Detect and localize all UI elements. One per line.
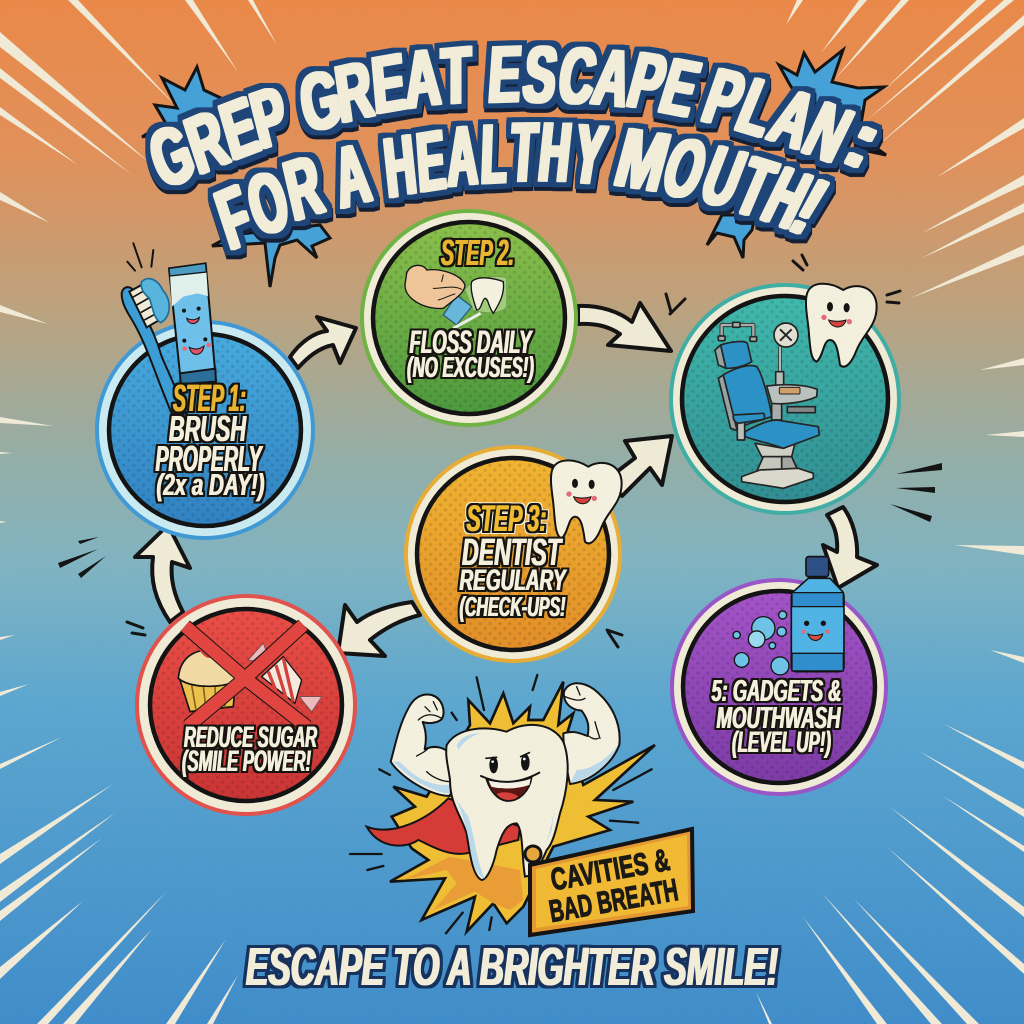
sugar badge bbox=[137, 596, 355, 814]
step 3 body: REGULARY bbox=[459, 564, 567, 597]
title line 1: P bbox=[243, 70, 296, 167]
mouthwash text: MOUTHWASH bbox=[716, 700, 840, 735]
title line 1: A bbox=[403, 33, 443, 127]
step 1 text bbox=[155, 378, 264, 502]
title line 1: T bbox=[441, 31, 471, 122]
arrow: step 2 to dentist chair bbox=[578, 303, 671, 351]
step 3 body: (CHECK-UPS! bbox=[459, 591, 565, 622]
muscular arms bbox=[391, 683, 620, 796]
title line 1: R bbox=[331, 45, 378, 141]
title line 1: C bbox=[553, 31, 602, 122]
title line 1: P bbox=[693, 53, 754, 145]
title line 2: T bbox=[508, 106, 540, 200]
title line 2: H bbox=[750, 150, 823, 246]
title line 1: A bbox=[586, 33, 639, 125]
title line 1: P bbox=[619, 36, 674, 128]
sign board bbox=[530, 829, 693, 935]
arrow: step 3 to reduce sugar bbox=[338, 602, 420, 656]
panel: step 3 dentist bbox=[406, 447, 622, 661]
mouthwash badge bbox=[672, 580, 886, 794]
title line 2: R bbox=[277, 137, 330, 239]
step 2 text: FLOSS DAILY bbox=[409, 324, 533, 360]
sugar text bbox=[182, 721, 317, 778]
step 3 badge bbox=[406, 447, 620, 661]
sign: cavities and bad breath bbox=[525, 829, 693, 935]
step 1 badge bbox=[97, 322, 313, 538]
panel: step 1 brush bbox=[97, 243, 313, 538]
title line 1: E bbox=[486, 30, 524, 121]
icon: smiling tooth on chair badge bbox=[806, 284, 877, 367]
title line 1: : bbox=[831, 95, 898, 185]
title line 1: E bbox=[212, 81, 267, 178]
title line 2: O bbox=[653, 120, 717, 217]
title line 1: G bbox=[294, 53, 347, 151]
step 3 body bbox=[459, 532, 567, 622]
panel: reduce sugar bbox=[137, 596, 355, 814]
panel: step 2 floss bbox=[362, 211, 576, 425]
icon: crossed out cupcake and candy bbox=[178, 625, 322, 727]
title line 1: E bbox=[369, 37, 409, 132]
icon: dental chair bbox=[715, 322, 819, 488]
mouthwash text: (LEVEL UP!) bbox=[732, 726, 831, 759]
title bbox=[139, 30, 898, 268]
step 2 text: (NO EXCUSES!) bbox=[406, 352, 534, 384]
arrow: dentist chair to mouthwash bbox=[823, 507, 877, 588]
sign text: BAD BREATH bbox=[547, 872, 681, 929]
icon: hand flossing tooth bbox=[405, 265, 507, 328]
red cape bbox=[367, 798, 520, 854]
burst orange patch bbox=[403, 857, 523, 910]
title line 2: U bbox=[690, 129, 756, 226]
title line 1 bbox=[139, 30, 898, 207]
arrow: step 3 to dentist chair bbox=[606, 436, 672, 496]
panel: dentist chair bbox=[671, 284, 899, 513]
step 1 text: PROPERLY bbox=[155, 438, 263, 479]
title line 2 bbox=[206, 106, 842, 268]
sign text: CAVITIES & bbox=[548, 842, 672, 897]
title line 2: T bbox=[723, 140, 787, 235]
title line 1: L bbox=[726, 63, 788, 154]
title line 2: F bbox=[206, 168, 262, 268]
step 2 badge bbox=[362, 211, 576, 425]
title line 2: M bbox=[607, 112, 678, 210]
title line 1: G bbox=[139, 107, 205, 207]
title line 2: L bbox=[480, 108, 508, 203]
tooth body bbox=[446, 725, 568, 880]
title line 2: E bbox=[414, 113, 448, 211]
title line 2: O bbox=[238, 152, 298, 255]
title line 2: A bbox=[328, 125, 376, 227]
title line 1: N bbox=[791, 87, 864, 180]
title line 1: S bbox=[519, 31, 562, 120]
step 1 text: (2x a DAY!) bbox=[156, 467, 264, 502]
title line 2: H bbox=[535, 106, 575, 200]
sign inner panel bbox=[536, 835, 688, 928]
title line 2: A bbox=[447, 109, 478, 206]
title line 2: ! bbox=[777, 163, 842, 252]
toothpaste faces bbox=[182, 307, 211, 354]
step 1 text: STEP 1: bbox=[172, 378, 246, 420]
mouthwash text: 5: GADGETS & bbox=[711, 673, 841, 708]
icon: mouthwash bottle and bubbles bbox=[733, 557, 844, 675]
panel: gadgets and mouthwash bbox=[672, 557, 886, 794]
title line 1: A bbox=[758, 73, 828, 166]
step 3 text bbox=[459, 498, 567, 622]
title starbursts bbox=[142, 50, 886, 287]
sign text bbox=[541, 841, 681, 929]
yellow starburst bbox=[390, 682, 655, 932]
tooth face bbox=[481, 753, 539, 801]
mouthwash text bbox=[711, 673, 841, 759]
hero action lines bbox=[350, 675, 652, 933]
title line 2: Y bbox=[568, 108, 611, 203]
icon: toothbrush and toothpaste bbox=[122, 243, 216, 413]
title line 1: R bbox=[177, 93, 237, 192]
arrow: step 1 to step 2 bbox=[290, 317, 356, 368]
step 3 label: STEP 3: bbox=[466, 498, 546, 539]
step 1 text: BRUSH bbox=[168, 408, 246, 449]
dentist chair badge bbox=[671, 285, 899, 513]
step 2 text: STEP 2. bbox=[440, 232, 514, 273]
hero: muscular superhero tooth bbox=[350, 675, 655, 933]
title line 2: H bbox=[380, 118, 420, 217]
step 3 body: DENTIST bbox=[462, 532, 562, 574]
sign pin bbox=[525, 846, 541, 862]
action ticks bbox=[58, 255, 942, 647]
arrow: reduce sugar to step 1 bbox=[135, 525, 190, 622]
step 2 text bbox=[406, 232, 534, 384]
title line 1: E bbox=[651, 42, 709, 134]
sugar text: (SMILE POWER! bbox=[182, 745, 311, 778]
sugar text: REDUCE SUGAR bbox=[184, 721, 317, 754]
icon: smiling tooth on step 3 bbox=[551, 460, 622, 543]
